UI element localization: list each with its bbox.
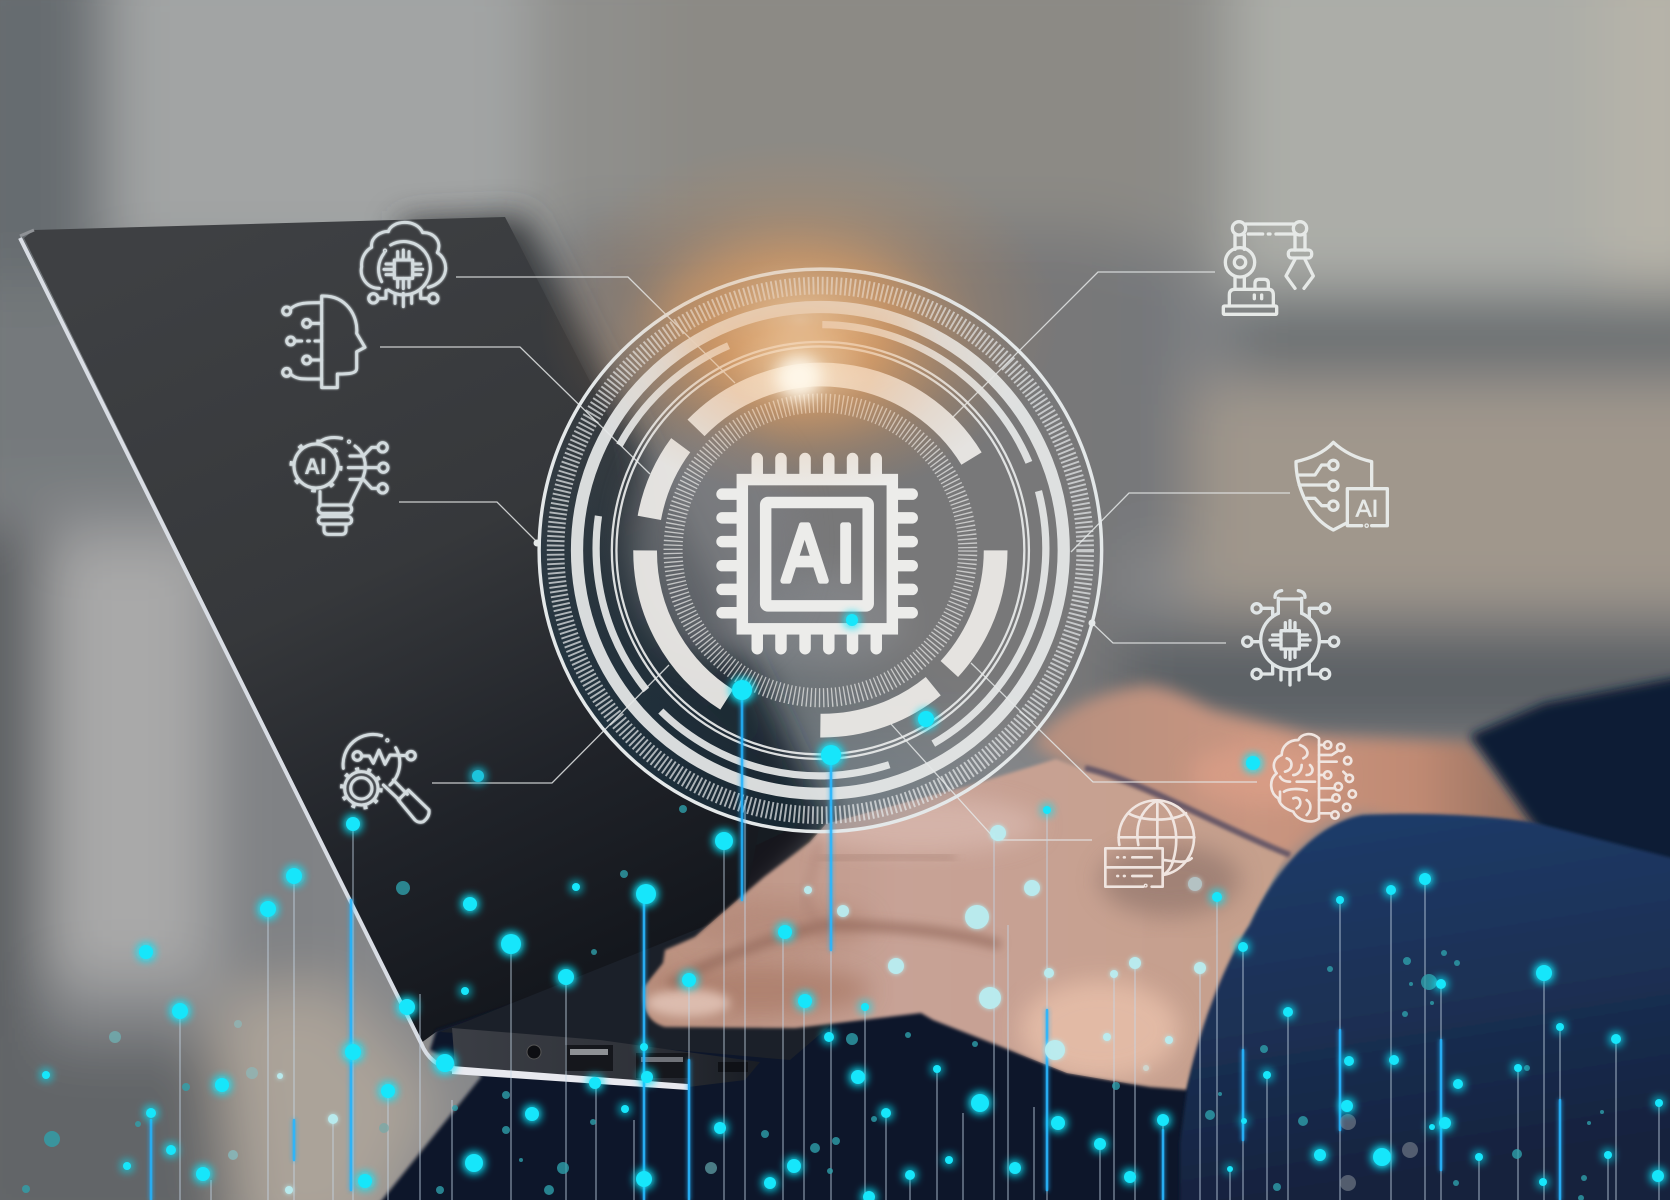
thick ring <box>577 307 1064 794</box>
icon: AI bulb <box>291 437 388 534</box>
AI label: I <box>837 508 855 598</box>
thin double ring <box>612 342 1029 759</box>
icon: AI bulb: AI <box>304 454 326 479</box>
icon: AI shield <box>1296 442 1387 530</box>
hologram ring with AI chip <box>539 269 1102 832</box>
connector nodes <box>534 540 1096 626</box>
laptop silver edge <box>20 230 688 1090</box>
laptop screen <box>24 216 835 1043</box>
chip <box>722 459 912 649</box>
upper right sleeve <box>1470 675 1670 880</box>
particles: teal soft dots <box>22 805 1604 1200</box>
icon: robot arm <box>1223 222 1313 314</box>
AI label: A <box>783 508 827 598</box>
orange light flare back <box>540 140 1060 500</box>
orange light flare front <box>590 240 1010 495</box>
outer ticks <box>556 286 1085 815</box>
outer ring <box>539 269 1102 832</box>
particles: gray blur dots <box>1340 1114 1418 1191</box>
laptop deck and table <box>370 918 1210 1200</box>
upper hand highlight <box>1190 743 1340 807</box>
arc segments medium <box>596 325 1046 776</box>
icon: cloud chip <box>361 222 446 307</box>
connector lines <box>380 272 1290 840</box>
particles: pale dots on hand <box>277 825 1206 1194</box>
icon: globe server <box>1105 800 1194 887</box>
hand upper <box>1033 685 1545 867</box>
icon: AI shield: AI <box>1356 496 1378 523</box>
hand lower <box>643 759 1290 1090</box>
icon: brain circuit <box>1271 734 1356 821</box>
wide arc segments <box>645 375 996 726</box>
icon: flask chip <box>1243 591 1339 685</box>
particles: bright cyan dots <box>42 614 1664 1200</box>
inner ticks <box>673 403 968 698</box>
data streams: bright segments <box>151 695 1560 1200</box>
data streams: vertical lines <box>180 755 1659 1200</box>
icon: magnifier and gear <box>342 734 429 822</box>
icon: AI head <box>283 296 365 388</box>
hologram inner tint <box>538 268 1102 832</box>
jacket sleeve <box>1180 814 1670 1200</box>
